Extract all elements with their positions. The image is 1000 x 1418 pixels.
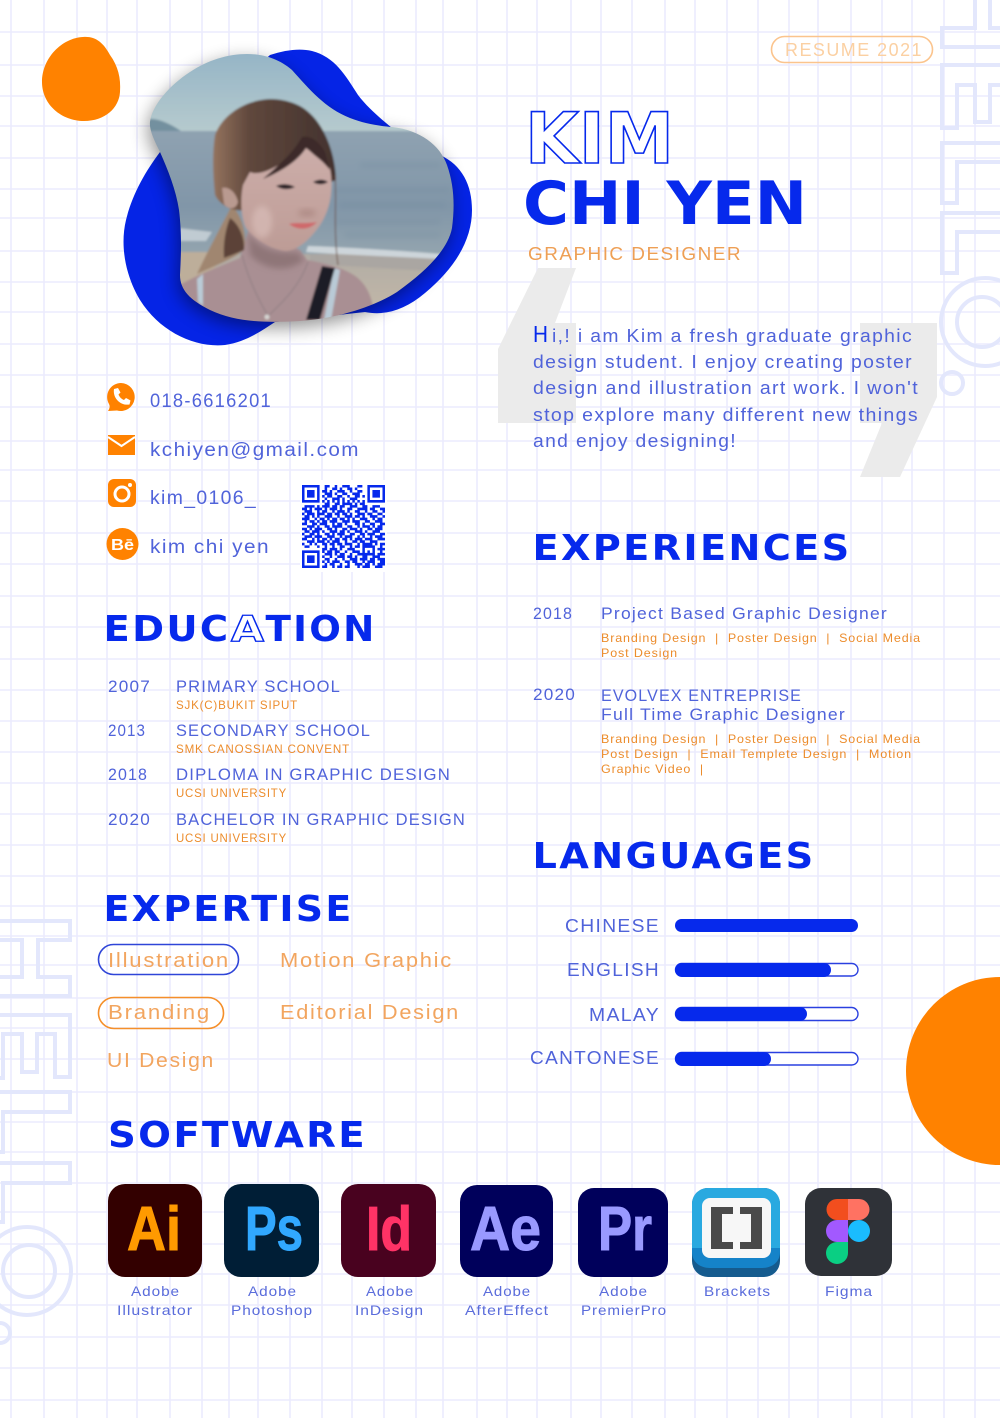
experience 2018: Branding Design | Poster Design | Social Media bbox=[601, 631, 921, 645]
icon: premiere pro: PremierPro bbox=[581, 1302, 667, 1318]
job title: GRAPHIC DESIGNER bbox=[528, 244, 742, 264]
heading: languages: LANGUAGES bbox=[532, 836, 816, 877]
icon: phone bbox=[107, 383, 135, 411]
icon: premiere pro: Pr bbox=[598, 1195, 652, 1264]
education 2007: PRIMARY SCHOOL bbox=[176, 677, 341, 696]
language: malay bbox=[589, 1005, 858, 1025]
icon: illustrator: Illustrator bbox=[117, 1302, 193, 1318]
language: english: ENGLISH bbox=[567, 960, 660, 980]
contact email: kchiyen@gmail.com bbox=[150, 440, 360, 461]
language: chinese bbox=[565, 916, 858, 936]
language: chinese: CHINESE bbox=[565, 916, 660, 936]
education 2013: SMK CANOSSIAN CONVENT bbox=[176, 742, 350, 756]
contact instagram: kim_0106_ bbox=[150, 488, 257, 509]
icon: email bbox=[108, 435, 135, 455]
icon: illustrator bbox=[108, 1184, 202, 1318]
education 2018 bbox=[108, 765, 451, 800]
language: english bbox=[567, 960, 858, 980]
icon: after effects: Adobe bbox=[483, 1283, 531, 1299]
heading: expertise: EXPERTISE bbox=[104, 889, 354, 930]
orange blob top left bbox=[42, 37, 120, 121]
photo shadow bbox=[148, 60, 452, 328]
decorative HELLO right bbox=[941, 0, 1000, 394]
heading: software: SOFTWARE bbox=[108, 1115, 367, 1156]
introduction text: and enjoy designing! bbox=[533, 431, 737, 451]
chart: language bars bbox=[530, 916, 858, 1068]
contact behance: kim chi yen bbox=[150, 537, 270, 558]
heading: education: EDUC bbox=[104, 609, 230, 650]
tag: motion graphic: Motion Graphic bbox=[280, 950, 453, 972]
icon: indesign bbox=[341, 1184, 436, 1318]
icon: photoshop: Photoshop bbox=[231, 1302, 313, 1318]
education 2007: 2007 bbox=[108, 677, 151, 696]
name: KIM bbox=[525, 98, 674, 180]
icon: photoshop: Adobe bbox=[248, 1283, 297, 1299]
icon: premiere pro: Adobe bbox=[599, 1283, 648, 1299]
experience 2018: Project Based Graphic Designer bbox=[601, 604, 888, 623]
panel: education list bbox=[108, 677, 466, 845]
icon: premiere pro bbox=[578, 1188, 668, 1318]
education 2007: SJK(C)BUKIT SIPUT bbox=[176, 698, 298, 712]
resume badge: RESUME 2021 bbox=[785, 40, 923, 60]
quote marks bbox=[498, 268, 937, 477]
blue blob behind photo bbox=[124, 50, 472, 345]
introduction text: design and illustration art work. I won't bbox=[533, 378, 919, 398]
experience 2020: Branding Design | Poster Design | Social Media bbox=[601, 732, 921, 746]
icon: after effects: AfterEffect bbox=[465, 1302, 549, 1318]
icon: figma: Figma bbox=[825, 1283, 873, 1299]
education 2018: DIPLOMA IN GRAPHIC DESIGN bbox=[176, 765, 451, 784]
icon: indesign: Adobe bbox=[366, 1283, 414, 1299]
introduction text: design student. I enjoy creating poster bbox=[533, 352, 913, 372]
tag: branding: Branding bbox=[108, 1002, 211, 1024]
language: cantonese bbox=[530, 1048, 858, 1068]
icon: figma bbox=[805, 1188, 892, 1299]
education 2007 bbox=[108, 677, 341, 712]
tag: editorial design: Editorial Design bbox=[280, 1002, 460, 1024]
experience 2020 bbox=[533, 685, 921, 776]
portrait photo bbox=[150, 54, 454, 322]
education 2020: BACHELOR IN GRAPHIC DESIGN bbox=[176, 810, 466, 829]
tag: illustration bbox=[98, 944, 238, 974]
icon: photoshop bbox=[224, 1184, 319, 1318]
education 2013: 2013 bbox=[108, 721, 146, 740]
education 2013 bbox=[108, 721, 371, 756]
experience 2018 bbox=[533, 604, 921, 660]
icon: behance: Bē bbox=[111, 537, 134, 554]
experience 2020: Graphic Video | bbox=[601, 762, 704, 776]
icon: illustrator: Adobe bbox=[131, 1283, 180, 1299]
resume badge bbox=[772, 36, 932, 62]
heading: experiences: EXPERIENCES bbox=[532, 528, 852, 569]
icon: illustrator: Ai bbox=[127, 1195, 181, 1264]
icon: brackets bbox=[692, 1188, 780, 1299]
education 2020 bbox=[108, 810, 466, 845]
education 2013: SECONDARY SCHOOL bbox=[176, 721, 371, 740]
education 2018: UCSI UNIVERSITY bbox=[176, 786, 287, 800]
experience 2020: 2020 bbox=[533, 685, 576, 704]
experience 2020: Full Time Graphic Designer bbox=[601, 705, 846, 724]
experience 2018: Post Design bbox=[601, 646, 678, 660]
tag: ui design: UI Design bbox=[107, 1050, 215, 1072]
QR code bbox=[300, 480, 387, 572]
contact phone: 018-6616201 bbox=[150, 391, 272, 412]
heading: education: A bbox=[231, 609, 264, 650]
panel: software icons bbox=[108, 1184, 892, 1318]
icon: brackets: Brackets bbox=[704, 1283, 771, 1299]
orange half circle right bbox=[906, 977, 1000, 1165]
icon: indesign: Id bbox=[366, 1195, 412, 1264]
name bbox=[523, 98, 807, 239]
panel: experience list bbox=[533, 604, 921, 776]
heading: education bbox=[104, 609, 376, 650]
education 2020: UCSI UNIVERSITY bbox=[176, 831, 287, 845]
education 2018: 2018 bbox=[108, 765, 148, 784]
decorative HELLO left bbox=[0, 921, 71, 1343]
language: cantonese: CANTONESE bbox=[530, 1048, 660, 1068]
introduction text: stop explore many different new things bbox=[533, 405, 919, 425]
introduction text: i,! i am Kim a fresh graduate graphic bbox=[552, 326, 913, 346]
icon: after effects: Ae bbox=[470, 1195, 541, 1264]
introduction text: H bbox=[533, 321, 548, 347]
icon: indesign: InDesign bbox=[355, 1302, 424, 1318]
contact list bbox=[106, 383, 360, 560]
education 2020: 2020 bbox=[108, 810, 151, 829]
tag: branding bbox=[98, 998, 224, 1028]
icon: instagram bbox=[108, 479, 136, 507]
language: malay: MALAY bbox=[589, 1005, 660, 1025]
experience 2020: Post Design | Email Templete Design | Motion bbox=[601, 747, 912, 761]
introduction text bbox=[533, 321, 919, 451]
icon: behance bbox=[106, 528, 138, 560]
experience 2020: EVOLVEX ENTREPRISE bbox=[601, 686, 802, 705]
icon: after effects bbox=[460, 1185, 553, 1318]
name: CHI YEN bbox=[523, 169, 807, 239]
experience 2018: 2018 bbox=[533, 604, 573, 623]
tag: illustration: Illustration bbox=[108, 950, 230, 972]
heading: education: TION bbox=[266, 609, 376, 650]
panel: expertise tags bbox=[98, 944, 460, 1072]
icon: photoshop: Ps bbox=[245, 1195, 303, 1264]
